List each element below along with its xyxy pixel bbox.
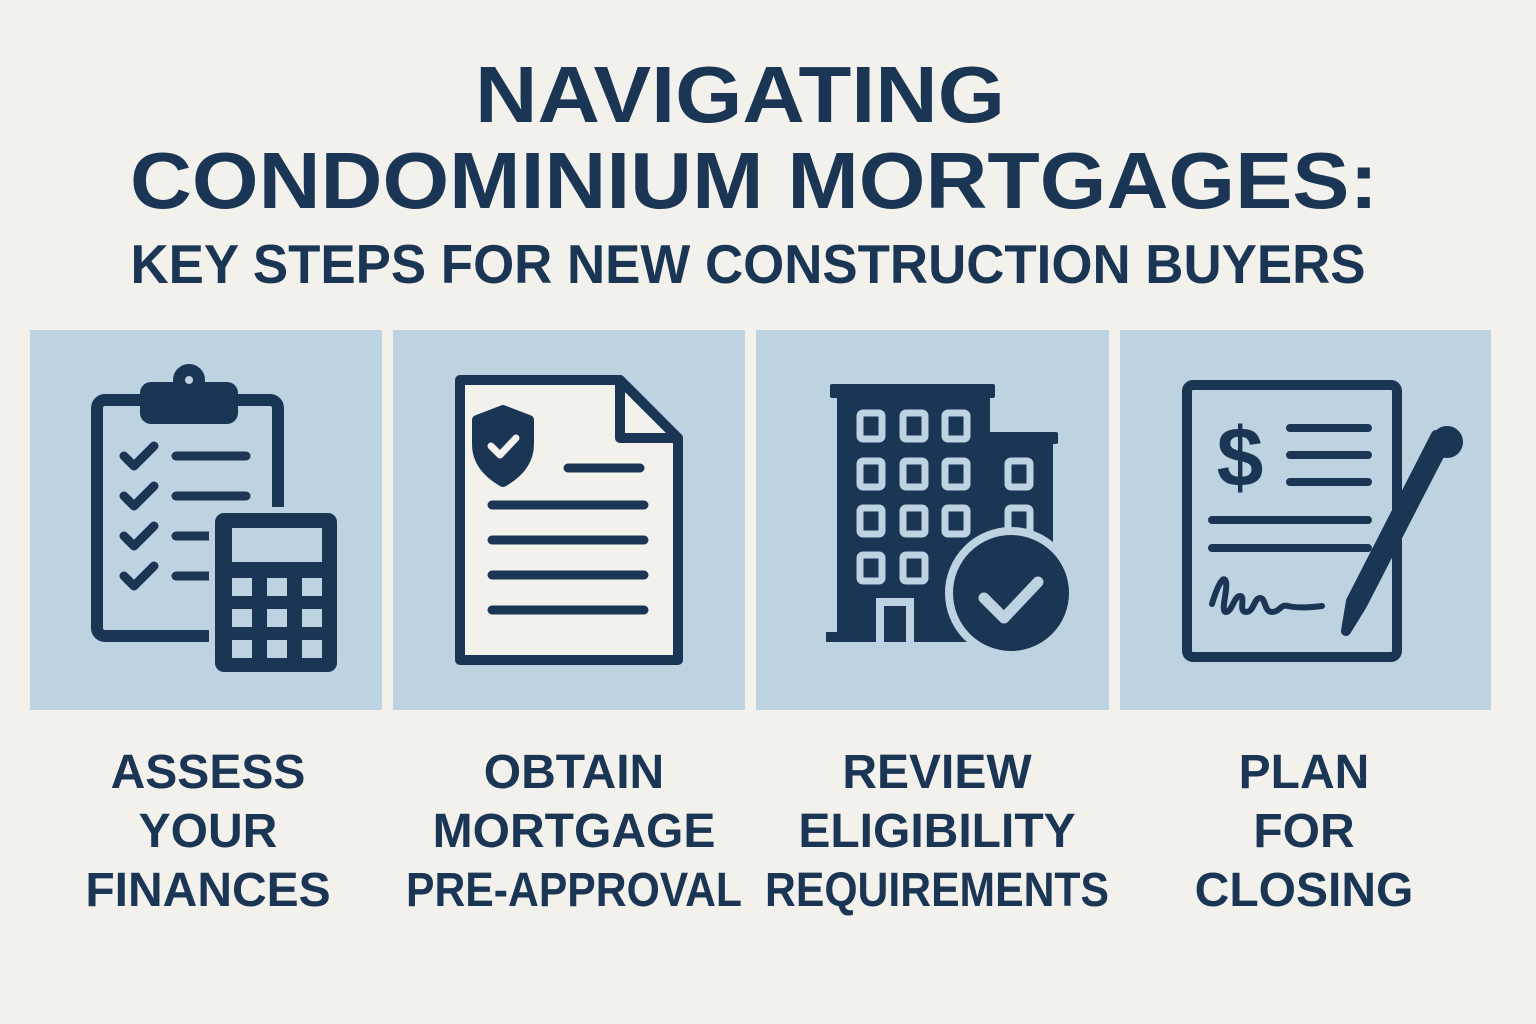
title: NAVIGATING — [475, 50, 1005, 139]
icon: contract with pen: $ — [1217, 410, 1263, 504]
label: review eligibility requirements: REVIEW — [842, 746, 1032, 799]
label: plan for closing: CLOSING — [1195, 864, 1413, 917]
label: assess your finances: YOUR — [139, 805, 277, 858]
label: assess your finances: FINANCES — [85, 864, 331, 917]
label: review eligibility requirements: ELIGIBILITY — [798, 805, 1076, 858]
title: CONDOMINIUM MORTGAGES: — [130, 136, 1378, 225]
label: obtain mortgage pre-approval: OBTAIN — [484, 746, 664, 799]
label: plan for closing: FOR — [1253, 805, 1355, 858]
label: assess your finances — [85, 746, 331, 917]
title — [130, 50, 1378, 295]
label: plan for closing: PLAN — [1239, 746, 1369, 799]
label: review eligibility requirements — [765, 746, 1109, 917]
icon: calculator — [212, 510, 340, 675]
panel: eligibility — [756, 330, 1109, 710]
icon: document with shield — [460, 380, 678, 660]
panel: closing — [1120, 330, 1491, 710]
icon: building with check — [826, 384, 1073, 655]
panel: assess finances — [30, 330, 382, 710]
label: plan for closing — [1195, 746, 1413, 917]
label: obtain mortgage pre-approval: MORTGAGE — [433, 805, 715, 858]
title: KEY STEPS FOR NEW CONSTRUCTION BUYERS — [130, 233, 1366, 295]
icon: contract with pen — [1187, 385, 1458, 657]
label: obtain mortgage pre-approval: PRE-APPROVAL — [406, 864, 742, 917]
label: obtain mortgage pre-approval — [406, 746, 742, 917]
icon: clipboard — [97, 370, 278, 636]
panel: pre-approval — [393, 330, 745, 710]
label: review eligibility requirements: REQUIREMENTS — [765, 864, 1109, 917]
label: assess your finances: ASSESS — [111, 746, 305, 799]
